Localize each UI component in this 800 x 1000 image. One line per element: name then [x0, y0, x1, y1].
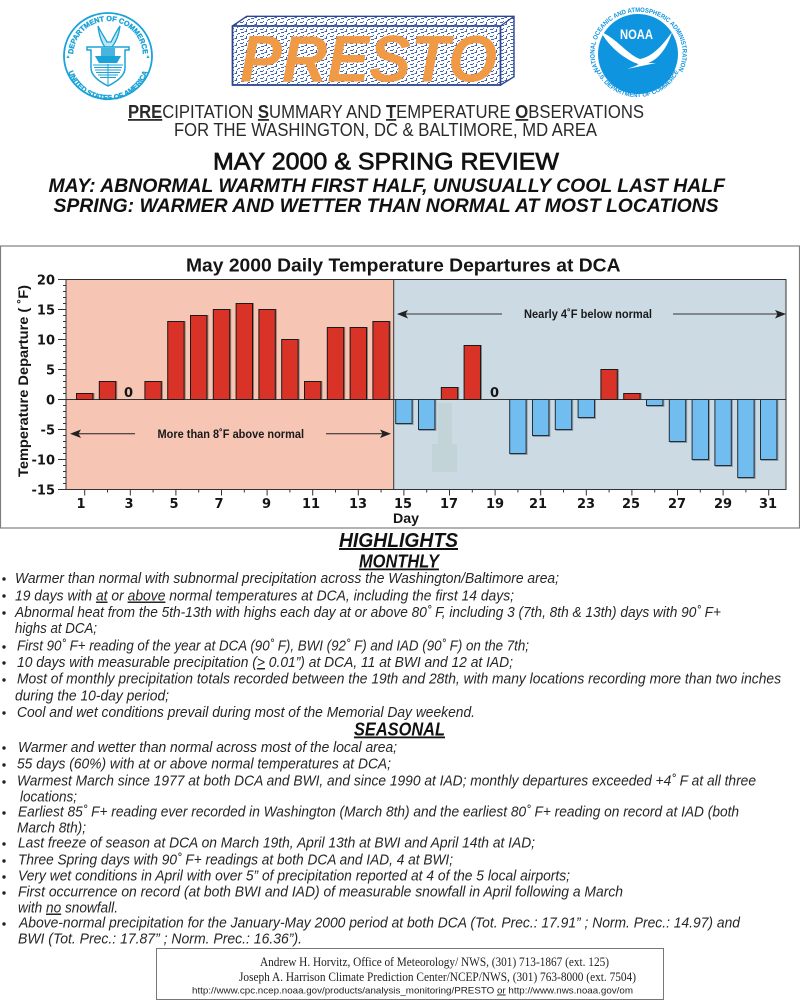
x axis labels: 25 [622, 497, 640, 512]
headline summary [48, 175, 726, 217]
x axis labels: 29 [714, 497, 732, 512]
text block: seasonal highlights: 55 days (60%) with at or above normal temperatures at DCA; [17, 756, 391, 772]
zero value labels: 0 [124, 386, 133, 401]
icon: Department of Commerce seal [63, 12, 153, 100]
panel: temperature departures chart [0, 246, 800, 528]
heading: seasonal: SEASONAL [354, 720, 445, 740]
text block: seasonal highlights: locations; [20, 788, 77, 806]
footer: contact box: http://www.cpc.ncep.noaa.gov/products/analysis_monitoring/PRESTO or http://www.nws.noaa.gov/om [192, 986, 633, 996]
y axis ticks [58, 280, 66, 490]
faint smudge in plot [432, 403, 457, 472]
y axis labels: -15 [32, 484, 55, 498]
subtitle: PRESTO full name [128, 102, 644, 140]
axes and ticks [66, 280, 786, 490]
y axis labels [32, 274, 55, 498]
text block: seasonal highlights: with no snowfall. [18, 900, 118, 916]
text block: monthly highlights: Abnormal heat from the 5th-13th with highs each day at or above 80˚ F, including 3 (7th, 8th & 13th) days with 90˚ F+ [14, 604, 721, 621]
arrow: cool period span [397, 309, 786, 321]
x axis labels: 3 [124, 497, 134, 512]
x axis labels: 27 [668, 497, 686, 512]
text block: monthly highlights: during the 10-day period; [15, 688, 169, 704]
text block: monthly highlights: highs at DCA; [15, 620, 97, 637]
arrow: warm period span: More than 8˚F above normal [158, 429, 304, 441]
x axis labels: 13 [349, 497, 367, 512]
zero value labels: 0 [490, 386, 499, 401]
text block: seasonal highlights: Warmest March since 1977 at both DCA and BWI, and since 1990 at IAD; monthly departures exceeded +4˚ F at all three [17, 772, 756, 790]
y axis labels: -5 [41, 424, 55, 438]
y axis labels: 20 [37, 274, 55, 288]
footer: contact box: Andrew H. Horvitz, Office of Meteorology/ NWS, (301) 713-1867 (ext. 125) [260, 955, 609, 969]
x axis labels [76, 497, 777, 512]
x axis labels: 31 [759, 497, 777, 512]
headline summary: MAY: ABNORMAL WARMTH FIRST HALF, UNUSUALLY COOL LAST HALF [48, 175, 726, 197]
text block: seasonal highlights: Three Spring days with 90˚ F+ readings at both DCA and IAD, 4 at BWI; [18, 852, 453, 868]
heading: highlights: HIGHLIGHTS [339, 530, 459, 552]
x axis labels: 21 [529, 497, 547, 512]
icon: NOAA logo: U.S. DEPARTMENT OF COMMERCE [596, 70, 679, 98]
arrow: cool period span: Nearly 4˚F below normal [524, 309, 652, 321]
zero value labels [124, 386, 499, 401]
text block: monthly highlights: Warmer than normal with subnormal precipitation across the Washington/Baltimore area; [15, 570, 559, 587]
text block: monthly highlights: First 90˚ F+ reading of the year at DCA (90˚ F), BWI (92˚ F) and IAD (90˚ F) on the 7th; [17, 638, 529, 654]
x axis labels: 9 [262, 497, 271, 512]
y axis labels: -10 [32, 454, 55, 468]
y axis title: Temperature Departure ( ˚F) [15, 285, 31, 477]
logo: PRESTO block: PRESTO [240, 22, 497, 96]
cool bars [396, 400, 777, 478]
text block: seasonal highlights: Above-normal precipitation for the January-May 2000 period at both DCA (Tot. Prec.: 17.91” ; Norm. Prec.: 14.97) and [18, 914, 741, 932]
text block: seasonal highlights: First occurrence on record (at both BWI and IAD) of measurable snowfall in April following a March [18, 884, 623, 900]
headline summary: SPRING: WARMER AND WETTER THAN NORMAL AT MOST LOCATIONS [54, 195, 718, 217]
text block: monthly highlights: Cool and wet conditions prevail during most of the Memorial Day weekend. [17, 704, 475, 721]
text block: seasonal highlights: Warmer and wetter than normal across most of the local area; [18, 739, 397, 756]
x axis labels: 15 [394, 497, 412, 512]
cool period background [394, 280, 786, 490]
text block: seasonal highlights: March 8th); [17, 820, 86, 836]
text block: monthly highlights: 10 days with measurable precipitation (> 0.01”) at DCA, 11 at BWI and 12 at IAD; [17, 654, 513, 671]
footer: contact box: Joseph A. Harrison Climate Prediction Center/NCEP/NWS, (301) 763-8000 (ext. 7504) [239, 970, 636, 984]
y axis labels: 10 [37, 334, 55, 348]
warm period background [66, 280, 394, 490]
x axis labels: 5 [169, 497, 179, 512]
y axis labels: 0 [46, 394, 55, 408]
y axis labels: 5 [46, 364, 55, 378]
warm bars [76, 304, 640, 400]
icon: Department of Commerce seal: DEPARTMENT OF COMMERCE [68, 16, 148, 54]
subtitle: PRESTO full name: PRECIPITATION SUMMARY AND TEMPERATURE OBSERVATIONS [128, 102, 644, 122]
subtitle: PRESTO full name: FOR THE WASHINGTON, DC & BALTIMORE, MD AREA [174, 120, 597, 140]
text block: monthly highlights [2, 570, 781, 721]
x axis ticks [85, 490, 769, 496]
text block: seasonal highlights [2, 739, 756, 948]
x axis labels: 23 [577, 497, 595, 512]
heading: monthly: MONTHLY [359, 552, 441, 572]
x axis labels: 19 [486, 497, 504, 512]
arrow: warm period span [70, 429, 391, 441]
x axis labels: 11 [302, 497, 320, 512]
icon: Department of Commerce seal: UNITED STATES OF AMERICA [68, 70, 148, 100]
x axis labels: 1 [76, 497, 86, 512]
text block: monthly highlights: 19 days with at or above normal temperatures at DCA, including the first 14 days; [15, 588, 514, 604]
title: MAY 2000 & SPRING REVIEW [213, 148, 560, 176]
icon: NOAA logo: NATIONAL OCEANIC AND ATMOSPHERIC ADMINISTRATION [590, 8, 687, 73]
y axis labels: 15 [37, 304, 55, 318]
x axis title: Day [393, 510, 419, 526]
chart title: May 2000 Daily Temperature Departures at DCA [186, 256, 620, 276]
text block: seasonal highlights: Very wet conditions in April with over 5” of precipitation reported at 4 of the 5 local airports; [18, 868, 570, 884]
text block: seasonal highlights: Last freeze of season at DCA on March 19th, April 13th at BWI and April 14th at IAD; [18, 834, 535, 852]
x axis labels: 7 [214, 497, 224, 512]
footer: contact box [156, 948, 664, 1000]
text block: seasonal highlights: BWI (Tot. Prec.: 17.87” ; Norm. Prec.: 16.36”). [18, 930, 302, 948]
icon: NOAA logo: NOAA [620, 26, 653, 42]
x axis labels: 17 [440, 497, 458, 512]
text block: seasonal highlights: Earliest 85˚ F+ reading ever recorded in Washington (March 8th) and the earliest 80˚ F+ reading on record at IAD (both [18, 804, 739, 820]
